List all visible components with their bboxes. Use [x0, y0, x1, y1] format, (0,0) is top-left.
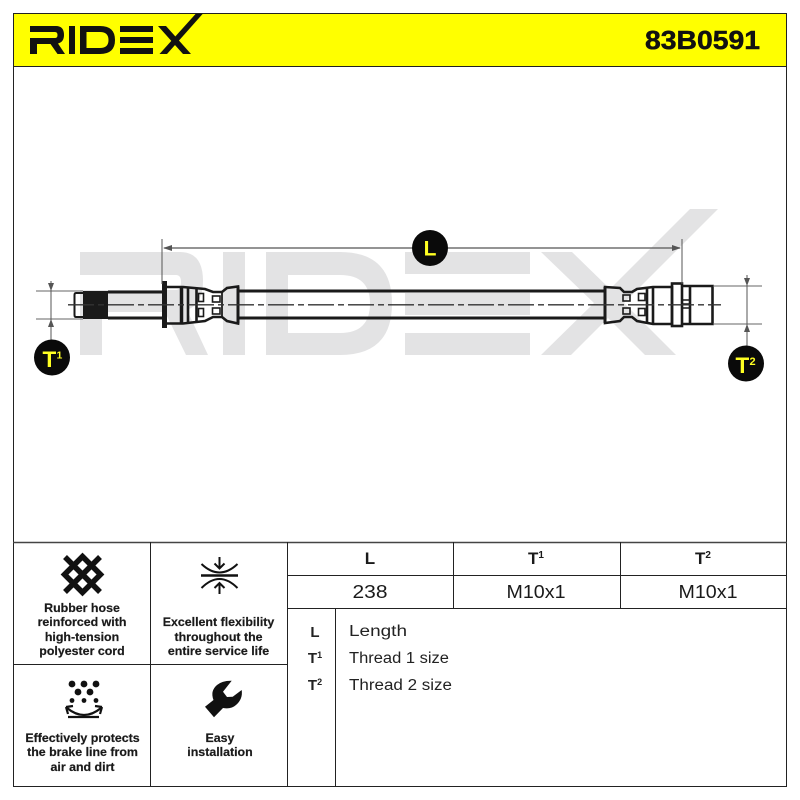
text: throughout the [174, 630, 263, 644]
legend symbols: 1 [317, 650, 322, 660]
badge T2: T [736, 353, 750, 378]
center line [68, 304, 721, 306]
text: high-tension [45, 630, 119, 644]
feature: flexibility [163, 557, 274, 658]
table headers: L [365, 549, 375, 568]
icon: mesh [64, 556, 100, 592]
badge T2 [728, 346, 764, 382]
dimension T2 [713, 275, 764, 382]
icon: dots and shield arc [66, 681, 102, 717]
badge T2: 2 [750, 356, 756, 368]
spec table [352, 549, 738, 602]
icon: wrench [205, 681, 242, 717]
text [38, 601, 126, 658]
text: Excellent flexibility [163, 615, 274, 629]
legend descriptions: Length [349, 623, 407, 640]
badge L [412, 230, 448, 266]
part number: 83B0591 [645, 25, 760, 55]
feature: protects [25, 681, 140, 774]
hose body [238, 291, 605, 318]
text [25, 731, 140, 774]
legend symbols: T [308, 650, 317, 667]
text: polyester cord [39, 644, 125, 658]
text [163, 615, 274, 658]
right fitting [605, 284, 712, 326]
badge T1 [34, 340, 70, 376]
legend [308, 623, 452, 694]
watermark logo [80, 209, 718, 355]
text: Effectively protects [25, 731, 140, 745]
legend symbols: L [310, 624, 320, 641]
text: installation [187, 745, 253, 759]
table headers: T [528, 549, 538, 568]
logo [30, 14, 203, 54]
dimension L [162, 230, 682, 284]
table headers: T [695, 549, 705, 568]
text: Rubber hose [44, 601, 120, 615]
text: reinforced with [38, 615, 126, 629]
legend symbols: 2 [317, 677, 322, 687]
feature: easy installation [187, 681, 253, 759]
text [187, 731, 253, 759]
legend symbols [308, 624, 322, 694]
table headers: 2 [705, 550, 711, 561]
bottom table grid [13, 542, 787, 787]
feature: rubber hose [38, 556, 126, 658]
badge T1: 1 [56, 350, 62, 362]
text: air and dirt [50, 760, 115, 774]
table values: M10x1 [506, 582, 566, 602]
brake hose drawing [68, 281, 721, 328]
icon: compression [201, 557, 238, 594]
dimension T1 [34, 281, 83, 376]
text: entire service life [168, 644, 269, 658]
legend descriptions: Thread 1 size [349, 650, 449, 667]
table headers [365, 549, 711, 568]
table headers: 1 [538, 550, 544, 561]
badge L: L [424, 238, 437, 260]
table values: 238 [352, 582, 388, 602]
legend descriptions: Thread 2 size [349, 677, 452, 694]
text: Easy [206, 731, 235, 745]
text: the brake line from [27, 745, 138, 759]
header band [14, 14, 786, 66]
legend symbols: T [308, 677, 317, 694]
badge T1: T [42, 347, 56, 372]
left fitting [74, 281, 238, 328]
table values: M10x1 [678, 582, 738, 602]
legend descriptions [349, 623, 452, 694]
table values [352, 582, 738, 602]
